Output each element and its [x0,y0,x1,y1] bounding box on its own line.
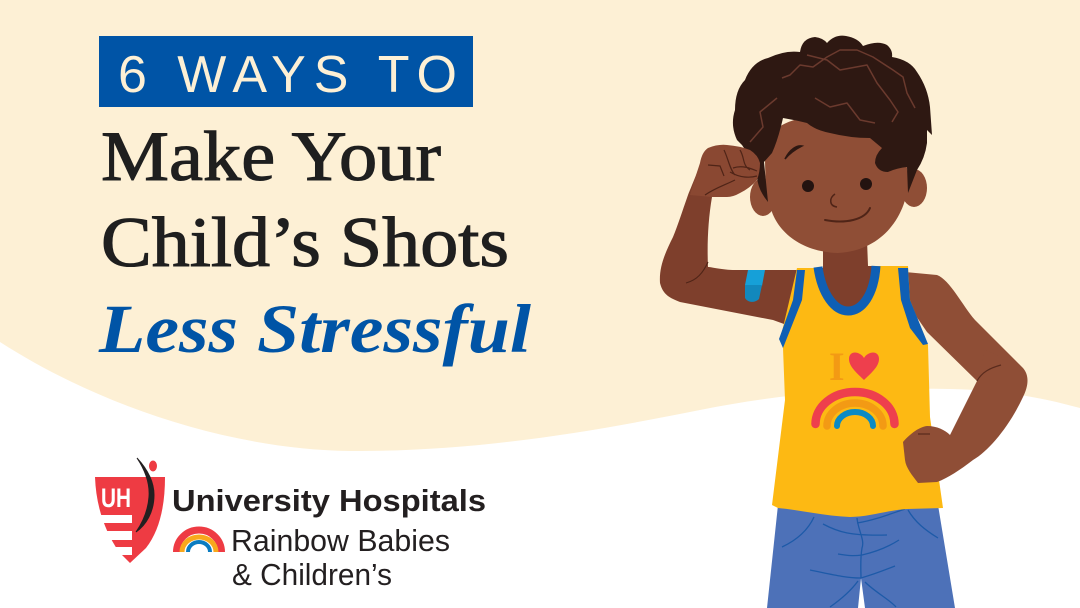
logo: University Hospitals Rainbow Babies and Children's [95,458,486,592]
logo rainbow [176,530,222,552]
smile [825,208,870,222]
logo text: Rainbow Babies and Children's [231,523,450,592]
title: Make Your [101,118,441,196]
logo text: University Hospitals: University Hospitals [172,483,486,518]
shirt graphic: I love [829,344,879,389]
eyebrow [785,146,802,159]
forearm and fist on hip [903,350,1023,483]
banner: 6 ways to: 6 WAYS TO [118,46,457,104]
title emphasis: less stressful: Less Stressful [98,291,532,367]
title: Child’s Shots [101,204,509,282]
logo text: Rainbow Babies and Children's: & Children’s [232,557,392,592]
raised fist [690,145,760,197]
face [765,116,908,253]
illustration: child [660,36,1028,608]
tank top [772,266,943,517]
logo text: Rainbow Babies and Children's: Rainbow Babies [231,523,450,558]
ears [750,169,927,216]
shirt graphic: I love: I [829,344,845,389]
shirt trim [779,270,805,348]
hair [733,36,932,202]
right shoulder and upper arm [905,272,1028,397]
shorts [767,505,955,608]
logo shield: UH [101,483,131,513]
nose [831,194,837,207]
logo shield [95,458,165,563]
eyes [802,178,872,192]
cream wave background [0,0,1080,451]
title [98,118,532,367]
neck and chest [812,240,880,312]
arm crease [686,262,708,283]
bandage [745,270,765,302]
shirt graphic: rainbow [816,392,895,426]
left arm raised [660,165,805,328]
